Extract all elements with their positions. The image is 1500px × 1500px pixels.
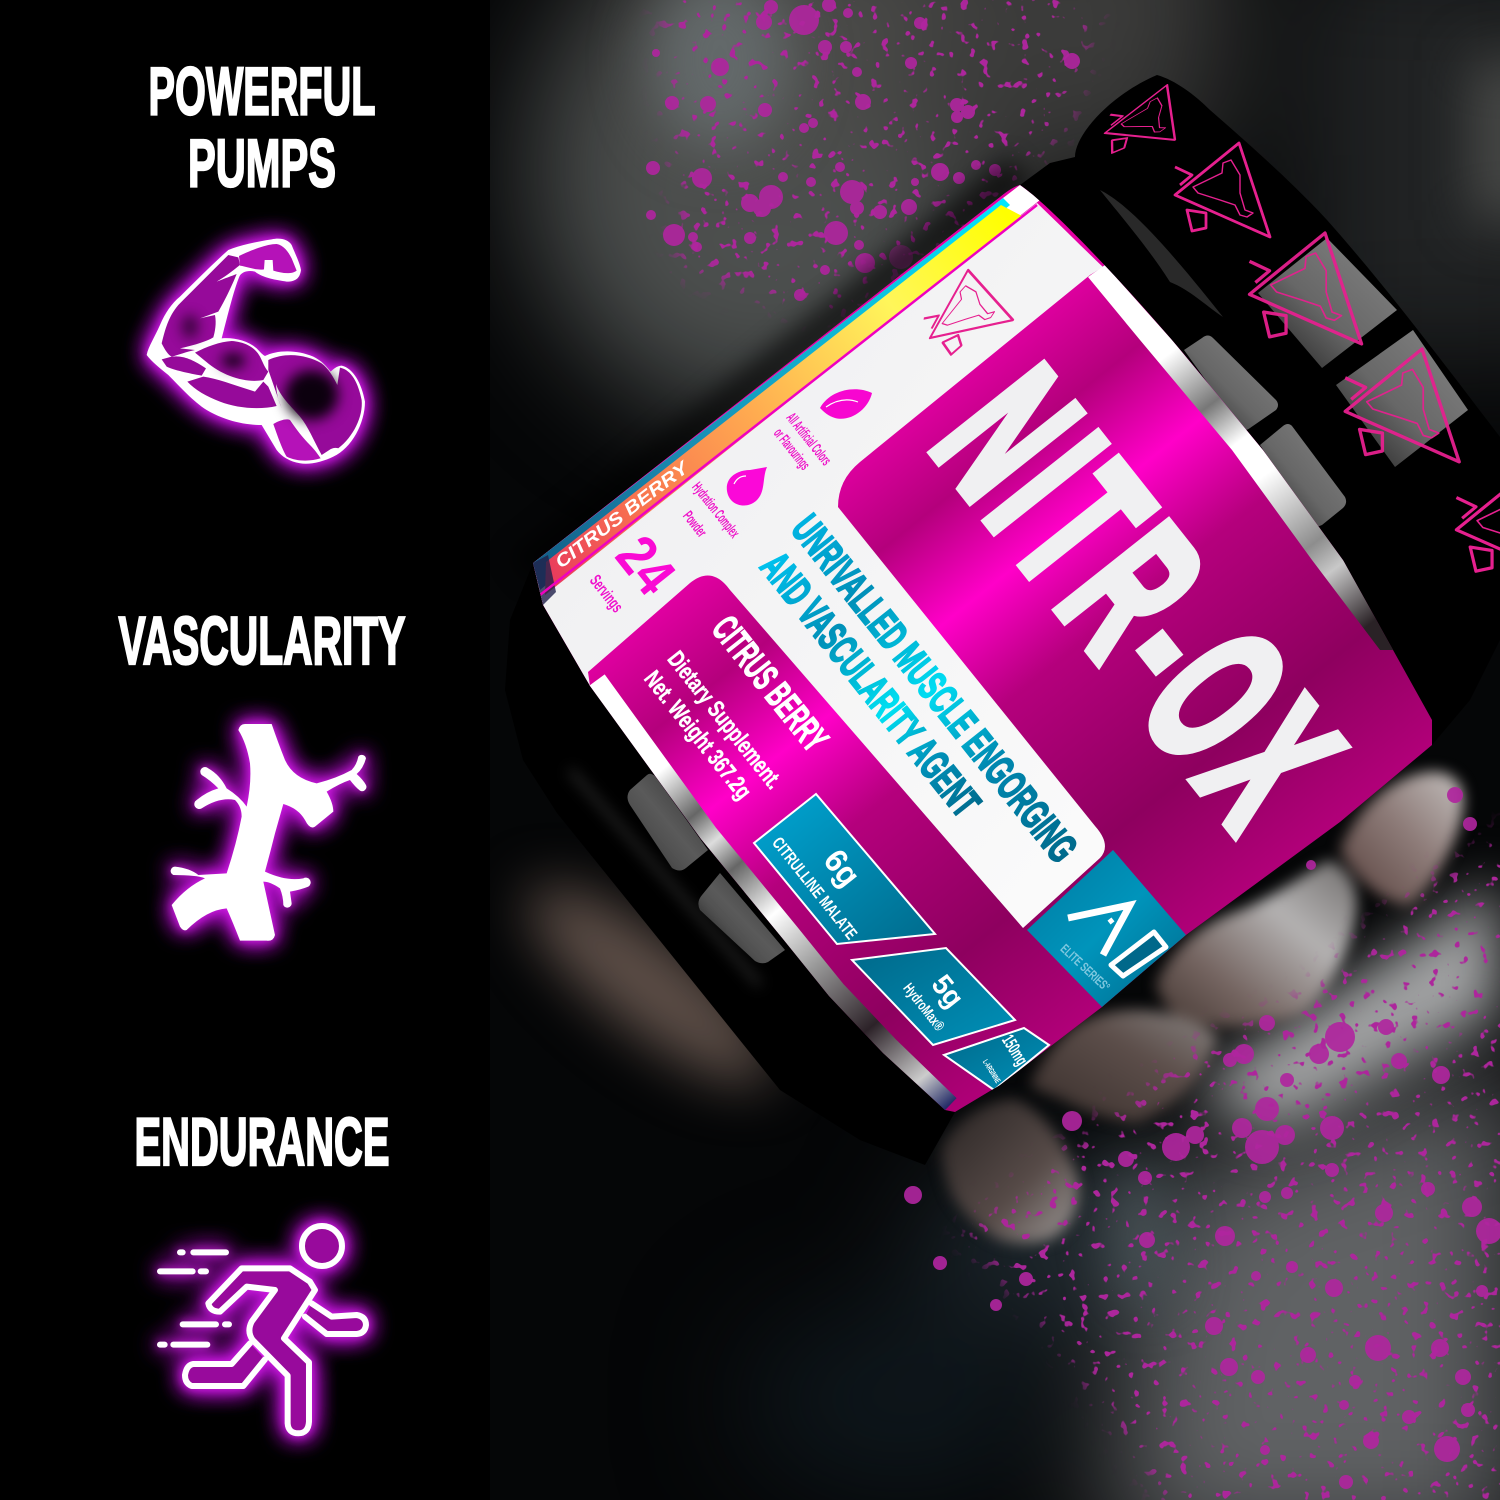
panel flavour and weight: Dietary Supplement.: [662, 646, 787, 794]
pink paint splatter: [646, 0, 1500, 1500]
pink label field: [533, 185, 1432, 1112]
icon: leaf: [820, 389, 872, 419]
artificial colors caption: [774, 413, 830, 470]
heading: powerful pumps: POWERFUL: [148, 54, 376, 130]
jar body: [505, 75, 1500, 1165]
icon: running man: [160, 1226, 366, 1433]
finger 2: [1156, 860, 1357, 1027]
ingredient: l-arginine: 150mg: [998, 1031, 1032, 1069]
AD triangle logo: [924, 268, 1014, 356]
panel flavour and weight: [638, 609, 836, 805]
ingredient: hydromax: [852, 948, 1015, 1045]
heading: powerful pumps: PUMPS: [188, 126, 336, 202]
ingredient: hydromax: HydroMax®: [900, 980, 948, 1035]
finger 4: [942, 1099, 1079, 1243]
artificial colors caption: or Flavourings: [770, 425, 813, 473]
lid logo pattern: [1097, 78, 1500, 578]
finger 3: [1030, 1010, 1218, 1123]
tagline: [752, 506, 1087, 871]
finger 1: [1340, 772, 1463, 905]
band flavour text: CITRUS BERRY: [551, 456, 694, 572]
photo background: [490, 0, 1500, 1500]
tagline: AND VASCULARITY AGENT: [752, 543, 990, 825]
panel flavour and weight: Net. Weight 367.2g: [638, 666, 757, 805]
jar lid grey windows: [570, 190, 1468, 985]
ingredient: citrulline malate: [754, 794, 935, 944]
heading: vascularity: VASCULARITY: [118, 603, 406, 679]
hand fingers: [942, 772, 1463, 1243]
icon: blood vessel: [171, 724, 366, 941]
AD elite series block: [1027, 850, 1186, 1007]
hydration caption: Powder: [679, 508, 710, 541]
icon: hydration drop: [727, 467, 767, 506]
AD logo: [1068, 905, 1166, 976]
ingredient: hydromax: 5g: [925, 969, 970, 1014]
icon: flexed arm: [147, 239, 365, 464]
ingredient: citrulline malate: CITRULLINE MALATE: [768, 833, 861, 943]
servings number: 24: [603, 524, 688, 607]
artificial colors caption: All Artificial Colors: [783, 410, 835, 469]
product label: [533, 185, 1432, 1112]
silver strips: [597, 265, 1410, 1105]
top colour band: [533, 185, 1040, 605]
ingredient: citrulline malate: 6g: [817, 842, 868, 893]
left panel background: [0, 0, 490, 1500]
heading: powerful pumps: [148, 54, 376, 202]
hydration caption: [682, 481, 739, 539]
white label area: [540, 203, 1105, 928]
ingredient: l-arginine: [944, 1028, 1049, 1090]
servings caption: Servings: [586, 571, 627, 616]
ingredient: l-arginine: L-ARGININE: [981, 1058, 1002, 1085]
shadow under jar edge: [651, 154, 1028, 462]
tagline: UNRIVALLED MUSCLE ENGORGING: [783, 506, 1087, 871]
hydration caption: Hydration Complex: [688, 479, 743, 542]
elite series text: ELITE SERIES°: [1058, 941, 1113, 994]
panel: product photo: [490, 0, 1500, 1500]
heading: endurance: ENDURANCE: [134, 1104, 390, 1180]
panel flavour and weight: CITRUS BERRY: [703, 609, 836, 760]
